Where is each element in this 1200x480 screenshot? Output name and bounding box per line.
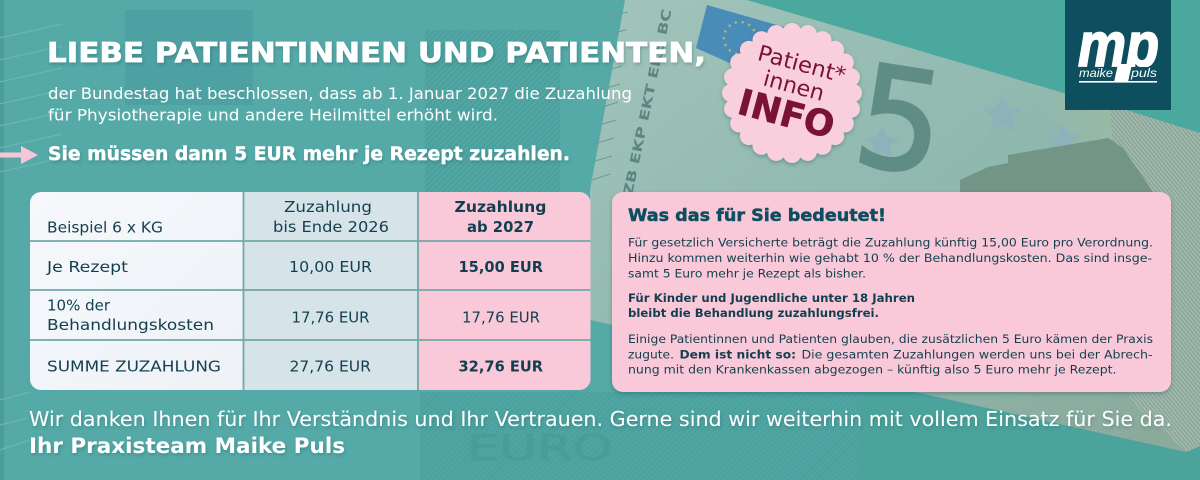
table: Zuzahlung comparison: Zuzahlung xyxy=(284,198,372,216)
intro text: für Physiotherapie und andere Heilmittel erhöht wird. xyxy=(48,106,498,124)
logo block xyxy=(1065,0,1171,110)
panel body text: Dem ist nicht so: xyxy=(680,348,796,362)
banknote microtext: ZB EKP EKT EKB BC xyxy=(621,8,675,197)
badge: Patient*innen INFO seal: innen xyxy=(761,67,827,107)
table: Zuzahlung comparison: 27,76 EUR xyxy=(290,358,371,376)
panel body text: zugute. xyxy=(628,348,674,362)
logo block: maike xyxy=(1079,68,1113,80)
table: Zuzahlung comparison: bis Ende 2026 xyxy=(273,218,389,236)
banknote stars xyxy=(864,95,1080,158)
panel: Was das für Sie bedeutet xyxy=(612,192,1171,392)
banknote numeral 5: 5 xyxy=(845,35,955,209)
signature: Ihr Praxisteam Maike Puls xyxy=(29,434,345,458)
intro text xyxy=(48,84,632,124)
badge: Patient*innen INFO seal: INFO xyxy=(734,82,839,147)
table: Zuzahlung comparison: Behandlungskosten xyxy=(47,316,214,334)
panel body text: nung mit den Krankenkassen abgezogen – künftig also 5 Euro mehr je Rezept. xyxy=(628,362,1116,376)
logo block: mp xyxy=(1078,11,1159,80)
table: Zuzahlung comparison: Je Rezept xyxy=(46,258,128,276)
panel body text: Für gesetzlich Versicherte beträgt die Zuzahlung künftig 15,00 Euro pro Verordnung. xyxy=(628,236,1153,250)
key message: Sie müssen dann 5 EUR mehr je Rezept zuzahlen. xyxy=(48,144,570,165)
panel body text: Für Kinder und Jugendliche unter 18 Jahren xyxy=(628,291,915,305)
table: Zuzahlung comparison: Beispiel 6 x KG xyxy=(47,218,163,236)
table: Zuzahlung comparison: 15,00 EUR xyxy=(458,258,543,276)
panel body text xyxy=(628,236,1153,376)
table: Zuzahlung comparison: 17,76 EUR xyxy=(462,308,540,326)
table: Zuzahlung comparison: 10% der xyxy=(47,296,111,314)
table: Zuzahlung comparison: Zuzahlung xyxy=(454,198,546,216)
heading: LIEBE PATIENTINNEN UND PATIENTEN, xyxy=(47,36,706,69)
closing message: Wir danken Ihnen für Ihr Verständnis und Ihr Vertrauen. Gerne sind wir weiterhin mit vollem Einsatz für Sie da. xyxy=(29,407,1172,431)
table: Zuzahlung comparison: 17,76 EUR xyxy=(292,308,370,326)
panel body text: bleibt die Behandlung zuzahlungsfrei. xyxy=(628,306,879,320)
table: Zuzahlung comparison: SUMME ZUZAHLUNG xyxy=(47,358,221,376)
panel heading: Was das für Sie bedeutet! xyxy=(628,206,886,226)
icon: EU flag on banknote xyxy=(696,5,784,65)
arrow xyxy=(0,146,38,164)
table: Zuzahlung comparison: ab 2027 xyxy=(467,218,534,236)
panel body text: samt 5 Euro mehr je Rezept als bisher. xyxy=(628,266,866,280)
intro text: der Bundestag hat beschlossen, dass ab 1. Januar 2027 die Zuzahlung xyxy=(48,84,632,103)
background: teal banknote backdrop: EURO xyxy=(467,428,613,469)
panel body text: Einige Patientinnen und Patienten glauben, die zusätzlichen 5 Euro kämen der Praxis xyxy=(628,332,1153,346)
badge: Patient*innen INFO seal xyxy=(722,23,862,163)
table: Zuzahlung comparison: 10,00 EUR xyxy=(289,258,372,276)
table: Zuzahlung comparison xyxy=(30,192,591,390)
panel body text: Die gesamten Zuzahlungen werden uns bei der Abrech- xyxy=(802,348,1152,362)
logo block: puls xyxy=(1130,68,1157,80)
panel body text: Hinzu kommen weiterhin wie gehabt 10 % der Behandlungskosten. Das sind insge- xyxy=(628,251,1152,265)
badge: Patient*innen INFO seal: Patient* xyxy=(755,41,848,89)
banknote architecture bands xyxy=(960,138,1153,192)
table: Zuzahlung comparison: 32,76 EUR xyxy=(458,358,543,376)
